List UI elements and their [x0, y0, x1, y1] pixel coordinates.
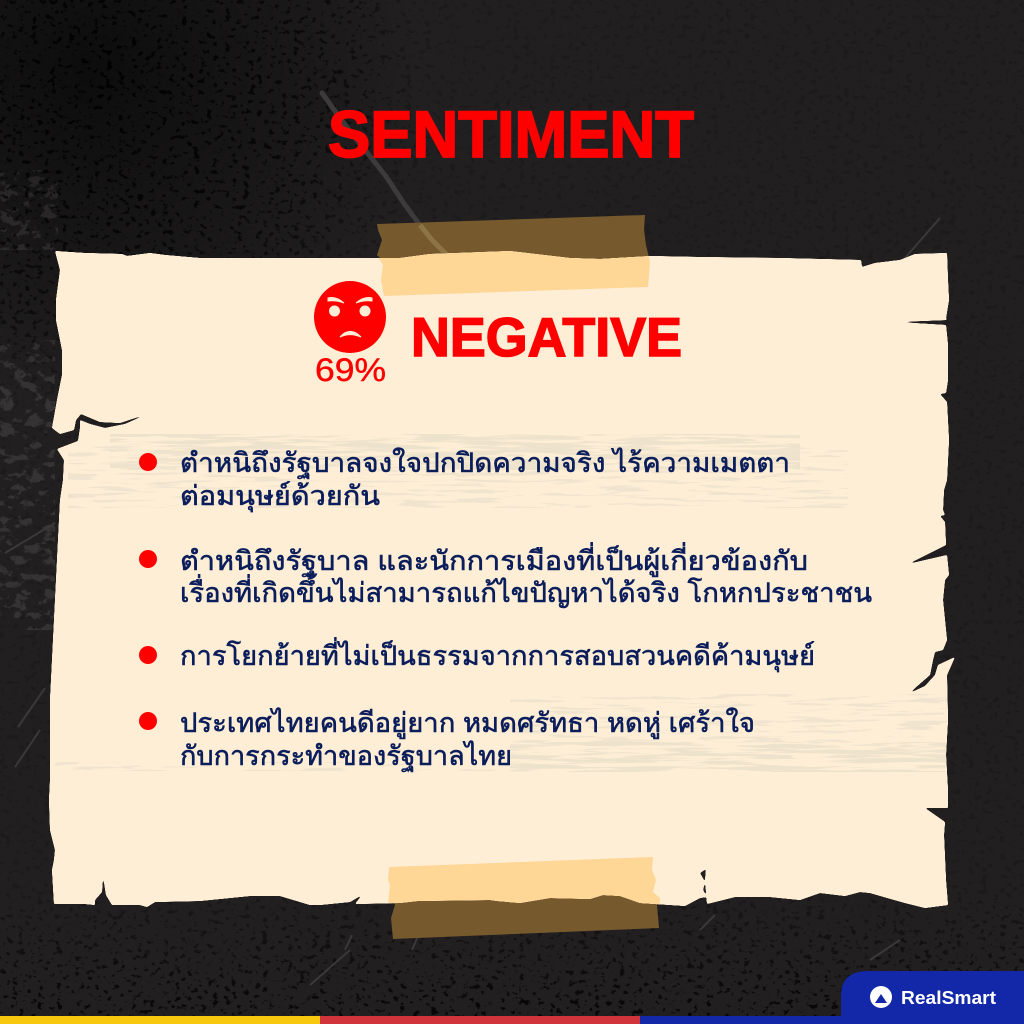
paper stains — [55, 434, 947, 772]
bullet item 1: ตำหนิถึงรัฐบาลจงใจปกปิดความจริง ไร้ความเมตตา — [180, 447, 790, 479]
tape: bottom, over paper — [388, 857, 660, 904]
bullet item 1 — [139, 447, 790, 513]
bullet item 2: เรื่องที่เกิดขึ้นไม่สามารถแก้ไขปัญหาได้จริง โกหกประชาชน — [180, 573, 872, 608]
bullet item 4: ประเทศไทยคนดีอยู่ยาก หมดศรัทธา หดหู่ เศร้าใจ — [180, 707, 755, 739]
bullet item 2 — [139, 542, 872, 608]
title: SENTIMENT — [328, 97, 694, 171]
paper sheet with torn edges — [49, 251, 955, 908]
heading: negative: NEGATIVE — [411, 306, 682, 368]
icon: brand logo — [870, 986, 892, 1008]
icon: angry face — [314, 281, 386, 353]
tape: top, over paper — [379, 251, 650, 296]
footer colour bar — [0, 1016, 1024, 1024]
bullet item 3: การโยกย้ายที่ไม่เป็นธรรมจากการสอบสวนคดีค้ามนุษย์ — [180, 637, 815, 673]
bullet item 2: ตำหนิถึงรัฐบาล และนักการเมืองที่เป็นผู้เกี่ยวข้องกับ — [180, 542, 808, 577]
bullet item 1: ต่อมนุษย์ด้วยกัน — [180, 480, 380, 513]
tape: bottom, over background — [388, 890, 659, 939]
tape: top, over background — [377, 215, 650, 262]
brand tab — [841, 971, 1024, 1024]
bullet item 4 — [139, 707, 755, 772]
percentage: 69% — [315, 352, 386, 388]
tape: top, scratch — [420, 225, 450, 258]
brand tab: RealSmart — [901, 988, 996, 1008]
bullet item 4: กับการกระทำของรัฐบาลไทย — [180, 741, 512, 772]
